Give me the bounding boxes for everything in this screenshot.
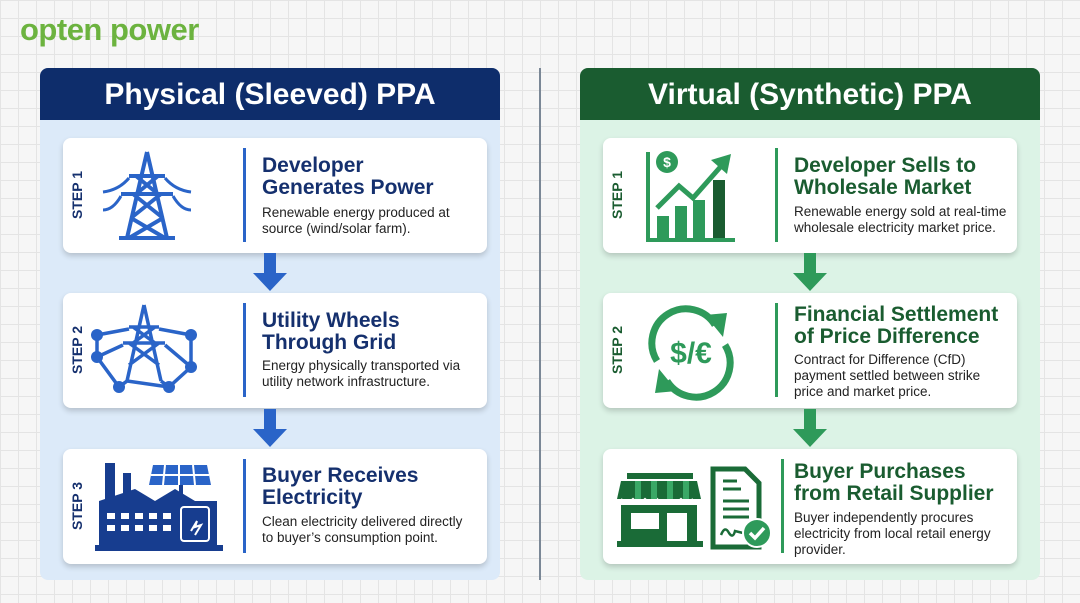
card: virtual step 3: provider. [794,542,846,557]
card: physical step 2 [63,293,487,408]
card: physical step 1: Generates Power [262,176,434,199]
card: physical step 3: to buyer’s consumption point. [262,530,438,545]
icon: factory with solar [95,463,223,551]
icon: market chart [646,151,735,242]
icon: grid pylon [91,304,197,393]
card: virtual step 2: payment settled between strike [794,368,980,383]
heading: virtual: Virtual (Synthetic) PPA [648,78,972,111]
card: physical step 3: Clean electricity delivered directly [262,514,462,529]
card: physical step 2: Energy physically transported via [262,358,460,373]
card: virtual step 1: Developer Sells to [794,154,976,177]
card: virtual step 3: Buyer independently procures [794,510,973,525]
card: virtual step 1: STEP 1 [609,171,625,219]
card: physical step 1: source (wind/solar farm). [262,221,411,236]
card: virtual step 3: Buyer Purchases [794,460,966,483]
icon: shop and contract [617,466,770,550]
card: physical step 3 [63,449,487,564]
heading: physical [40,68,500,120]
card: virtual step 1: Renewable energy sold at real-time [794,204,1006,219]
logo: opten power [20,12,199,47]
card: virtual step 2: Contract for Difference (CfD) [794,352,966,367]
card: physical step 1: Developer [262,154,364,177]
card: physical step 3: Buyer Receives [262,464,418,487]
arrow: virtual 1-2 [793,253,827,291]
panel: physical PPA [40,68,500,580]
icon: pylon [102,152,192,240]
icon: currency exchange [648,305,734,401]
card: virtual step 2: STEP 2 [609,326,625,374]
heading: physical: Physical (Sleeved) PPA [104,78,436,111]
arrow: virtual 2-3 [793,409,827,447]
icon: market chart: $ [663,154,671,170]
card: virtual step 2: Financial Settlement [794,303,998,326]
card: virtual step 3: electricity from local retail energy [794,526,991,541]
card: virtual step 1: wholesale electricity market price. [794,220,996,235]
icon: currency exchange: $/€ [670,337,712,370]
card: physical step 3: Electricity [262,486,362,509]
card: virtual step 2: price and market price. [794,384,931,399]
card: virtual step 2 [603,293,1017,408]
card: virtual step 2: of Price Difference [794,325,980,348]
heading: virtual [580,68,1040,120]
card: physical step 1 [63,138,487,253]
card: virtual step 3 [603,449,1017,564]
card: virtual step 1 [603,138,1017,253]
card: virtual step 1: Wholesale Market [794,176,971,199]
card: physical step 3: STEP 3 [69,482,85,530]
card: virtual step 3: from Retail Supplier [794,482,994,505]
card: physical step 2: STEP 2 [69,326,85,374]
arrow: physical 2-3 [253,409,287,447]
card: physical step 1: STEP 1 [69,171,85,219]
arrow: physical 1-2 [253,253,287,291]
card: physical step 2: utility network infrastructure. [262,374,430,389]
panel: virtual PPA [580,68,1040,580]
card: physical step 2: Utility Wheels [262,309,400,332]
divider [539,68,541,580]
card: physical step 1: Renewable energy produced at [262,205,450,220]
card: physical step 2: Through Grid [262,331,396,354]
